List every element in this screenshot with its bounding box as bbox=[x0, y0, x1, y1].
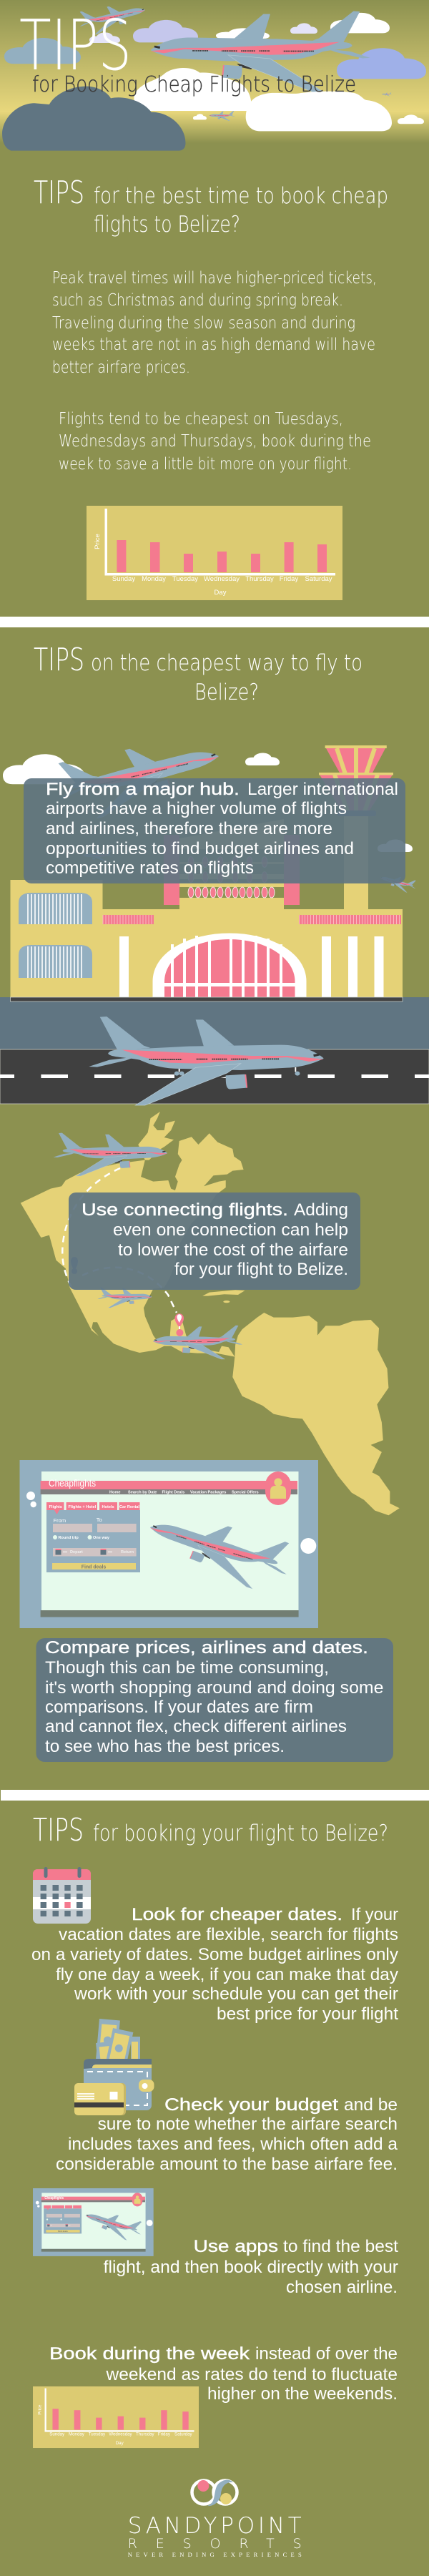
section 1 heading: flights to Belize? bbox=[94, 212, 240, 237]
tablet with flight search: Flights bbox=[49, 1505, 62, 1509]
text block: look for cheaper dates bbox=[31, 1905, 398, 2024]
text block: use apps: chosen airline. bbox=[286, 2278, 398, 2297]
bar chart: small price by day: Monday bbox=[69, 2431, 85, 2437]
bar chart: price by day: Monday bbox=[142, 575, 166, 583]
callout: compare prices: to see who has the best prices. bbox=[45, 1737, 285, 1756]
callout: use connecting flights: Adding bbox=[294, 1200, 348, 1220]
section 1 heading bbox=[34, 175, 388, 237]
text block: look for cheaper dates: best price for your flight bbox=[217, 2004, 398, 2024]
text block: peak travel: such as Christmas and during spring break. bbox=[52, 291, 343, 310]
logo: Sandypoint Resorts: SANDYPOINT bbox=[128, 2513, 302, 2539]
text block: cheapest days: Flights tend to be cheapest on Tuesdays, bbox=[59, 410, 343, 428]
text block: look for cheaper dates: Look for cheaper dates. bbox=[132, 1905, 342, 1924]
bar chart: price by day: Saturday bbox=[305, 575, 332, 583]
callout: use connecting flights: for your flight to Belize. bbox=[174, 1260, 348, 1279]
tablet with flight search: Search by Date bbox=[128, 1491, 157, 1495]
text block: check your budget: and be bbox=[344, 2095, 398, 2115]
takeoff plane bbox=[51, 728, 226, 826]
icon: calendar bbox=[33, 1867, 91, 1924]
text block: peak travel: better airfare prices. bbox=[52, 358, 190, 377]
title TIPS: TIPS bbox=[19, 5, 132, 86]
bar chart: small price by day: Wednesday bbox=[109, 2431, 133, 2437]
tablet with flight search: Hotels bbox=[102, 1505, 114, 1509]
callout: fly from a major hub bbox=[24, 778, 405, 883]
tablet with flight search: One way bbox=[93, 1536, 110, 1540]
text block: book during the week bbox=[49, 2344, 398, 2404]
clouds bbox=[3, 753, 413, 852]
text block: book during the week: weekend as rates do tend to fluctuate bbox=[105, 2365, 398, 2384]
text block: check your budget: includes taxes and fees, which often add a bbox=[68, 2135, 398, 2154]
icon: mini tablet: Find deals bbox=[58, 2230, 68, 2233]
text block: use apps: flight, and then book directly with your bbox=[104, 2258, 398, 2277]
logo: Sandypoint Resorts bbox=[128, 2480, 302, 2558]
bar chart: price by day: Sunday bbox=[112, 575, 135, 583]
tiny plane centre bbox=[209, 111, 235, 121]
icon: mini tablet bbox=[33, 2188, 154, 2256]
tablet with flight search: From bbox=[54, 1517, 66, 1524]
bar chart: price by day: Tuesday bbox=[172, 575, 198, 583]
faint pin bbox=[71, 1257, 78, 1274]
tablet with flight search: Special Offers bbox=[232, 1491, 259, 1495]
tablet with flight search: To bbox=[97, 1517, 102, 1523]
tablet with flight search: Return bbox=[121, 1550, 134, 1554]
plane over Mexico bbox=[97, 1288, 152, 1308]
small plane lower right bbox=[378, 871, 418, 894]
text block: use apps: Use apps bbox=[194, 2237, 278, 2256]
callout: fly from a major hub: competitive rates on flights bbox=[46, 858, 254, 878]
callout: use connecting flights: even one connection can help bbox=[113, 1220, 348, 1240]
map of the Americas bbox=[21, 1112, 400, 1515]
tablet with flight search: Round trip bbox=[59, 1536, 79, 1540]
callout: use connecting flights: to lower the cost of the airfare bbox=[118, 1240, 348, 1260]
bar chart: price by day: Day bbox=[214, 589, 227, 597]
icon: wallet with bills and card bbox=[74, 2019, 154, 2115]
section 3 heading bbox=[33, 1812, 388, 1848]
text block: cheapest days bbox=[59, 410, 371, 474]
runway bbox=[0, 997, 429, 1105]
tablet with flight search: Home bbox=[109, 1491, 121, 1495]
callout: compare prices bbox=[36, 1638, 393, 1762]
text block: look for cheaper dates: work with your schedule you can get their bbox=[74, 1984, 398, 2004]
tablet with flight search: Cheapflights bbox=[49, 1477, 96, 1489]
tablet with flight search: Find deals bbox=[82, 1565, 106, 1569]
text block: cheapest days: week to save a little bit more on your flight. bbox=[59, 455, 352, 474]
tablet with flight search: Car Rental bbox=[119, 1505, 139, 1509]
text block: book during the week: higher on the weekends. bbox=[207, 2384, 398, 2404]
bar chart: small price by day bbox=[33, 2386, 199, 2448]
bar chart: small price by day: Friday bbox=[158, 2431, 171, 2437]
faint small plane bbox=[82, 850, 113, 861]
text block: check your budget bbox=[56, 2095, 398, 2174]
bar chart: small price by day: Sunday bbox=[49, 2431, 65, 2437]
bar chart: small price by day: Day bbox=[116, 2441, 124, 2446]
text block: use apps: to find the best bbox=[283, 2237, 398, 2256]
text block: book during the week: instead of over the bbox=[255, 2344, 398, 2364]
bar chart: small price by day: Thursday bbox=[136, 2431, 155, 2437]
terminal building bbox=[10, 819, 403, 998]
land masses bbox=[21, 1112, 400, 1515]
logo: Sandypoint Resorts: RESORTS bbox=[128, 2536, 302, 2552]
text block: cheapest days: Wednesdays and Thursdays, book during the bbox=[59, 432, 371, 451]
airport scene bbox=[3, 728, 418, 998]
bar chart: small price by day: Price bbox=[38, 2404, 43, 2415]
callout: compare prices: and cannot flex, check different airlines bbox=[45, 1717, 347, 1736]
control tower bbox=[319, 745, 393, 909]
bar chart: price by day: Thursday bbox=[245, 575, 274, 583]
text block: use apps bbox=[104, 2237, 398, 2297]
cloud group: foreground clouds bbox=[2, 87, 424, 151]
callout: fly from a major hub: Fly from a major hub. bbox=[46, 780, 240, 799]
dashed flight path bbox=[62, 1168, 177, 1313]
banknotes bbox=[96, 2019, 140, 2067]
hero header bbox=[0, 0, 429, 151]
bar chart: small price by day: Tuesday bbox=[89, 2431, 106, 2437]
text block: peak travel bbox=[52, 269, 377, 377]
callout: compare prices: Though this can be time consuming, bbox=[45, 1658, 329, 1678]
tiny plane right bbox=[382, 92, 392, 97]
logo mark bbox=[192, 2480, 237, 2506]
text block: look for cheaper dates: vacation dates are flexible, search for flights bbox=[59, 1925, 398, 1944]
subtitle: for Booking Cheap Flights to Belize bbox=[32, 72, 356, 97]
cloud group: distant clouds bbox=[4, 13, 426, 111]
main hero plane bbox=[150, 11, 370, 94]
text block: peak travel: Traveling during the slow season and during bbox=[52, 314, 355, 333]
callout: fly from a major hub: opportunities to find budget airlines and bbox=[46, 839, 354, 858]
bar chart: price by day bbox=[87, 506, 342, 600]
bar chart: price by day: Wednesday bbox=[204, 575, 240, 583]
logo: Sandypoint Resorts: NEVER ENDING EXPERIENCES bbox=[128, 2551, 302, 2558]
callout: fly from a major hub: airports have a higher volume of flights bbox=[46, 799, 347, 818]
callout: compare prices: it's worth shopping around and doing some bbox=[45, 1678, 383, 1698]
runway plane bbox=[89, 1017, 324, 1105]
callout: compare prices: Compare prices, airlines and dates. bbox=[45, 1638, 368, 1657]
callout: use connecting flights: Use connecting flights. bbox=[82, 1200, 288, 1220]
text block: look for cheaper dates: on a variety of dates. Some budget airlines only bbox=[31, 1945, 398, 1964]
section 2 heading: TIPS bbox=[34, 642, 84, 678]
small plane top left bbox=[77, 0, 148, 37]
text block: check your budget: sure to note whether the airfare search bbox=[98, 2115, 398, 2134]
plane over Belize bbox=[153, 1326, 242, 1359]
tablet with flight search: Flight Deals bbox=[162, 1491, 184, 1495]
tablet with flight search bbox=[20, 1460, 318, 1628]
text block: check your budget: Check your budget bbox=[164, 2095, 338, 2115]
callout: compare prices: comparisons. If your dates are firm bbox=[45, 1698, 313, 1717]
text block: look for cheaper dates: If your bbox=[351, 1905, 398, 1924]
section 3 heading: TIPS bbox=[33, 1812, 84, 1848]
text block: check your budget: considerable amount to the base airfare fee. bbox=[56, 2155, 398, 2174]
tablet with flight search: Vacation Packages bbox=[190, 1491, 226, 1495]
icon: mini tablet: Cheapflights bbox=[44, 2196, 64, 2200]
bar chart: small price by day: Saturday bbox=[174, 2431, 192, 2437]
Belize pin bbox=[174, 1313, 184, 1336]
section 2 heading: on the cheapest way to fly to bbox=[91, 650, 363, 676]
plane over North America bbox=[54, 1133, 167, 1176]
text block: look for cheaper dates: fly one day a week, if you can make that day bbox=[56, 1965, 398, 1984]
tablet with flight search: Flights + Hotel bbox=[69, 1505, 97, 1509]
section 1 heading: TIPS bbox=[34, 175, 84, 211]
callout: fly from a major hub: Larger international bbox=[247, 780, 398, 799]
bar chart: price by day: Price bbox=[94, 534, 102, 549]
bar chart: price by day: Friday bbox=[280, 575, 298, 583]
callout: fly from a major hub: and airlines, therefore there are more bbox=[46, 819, 332, 838]
section 2 heading: Belize? bbox=[194, 680, 259, 705]
section 2 heading bbox=[34, 642, 363, 705]
callout: use connecting flights bbox=[69, 1192, 360, 1290]
text block: book during the week: Book during the week bbox=[49, 2344, 250, 2364]
tablet with flight search: Depart bbox=[70, 1550, 83, 1554]
